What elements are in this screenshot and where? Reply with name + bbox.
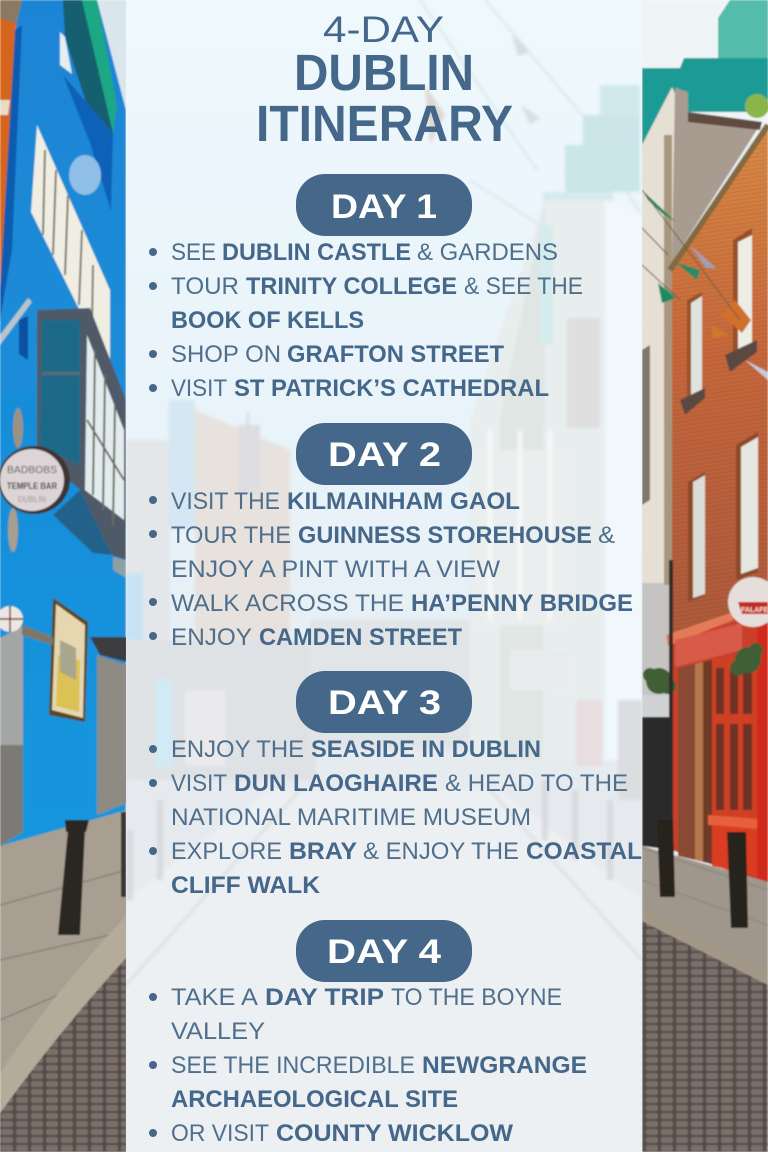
left: lamp <box>0 606 23 632</box>
title <box>256 9 513 152</box>
sign: Temple Bar: TEMPLE BAR <box>7 481 57 492</box>
list: day 1: BOOK OF KELLS <box>171 307 364 334</box>
list: day 4: SEE THE INCREDIBLE <box>171 1052 415 1079</box>
list: day 1: & GARDENS <box>417 239 558 266</box>
list: day 4: OR VISIT <box>171 1120 269 1147</box>
list: day 1: TOUR <box>171 273 239 300</box>
right: shopfront <box>666 610 768 885</box>
pill: day 1: DAY 1 <box>331 188 437 226</box>
list: day 1: VISIT <box>171 375 227 402</box>
pill: day 4: DAY 4 <box>327 933 441 971</box>
left: ground floor <box>0 626 23 846</box>
list: day 1: SEE <box>171 239 216 266</box>
section: day 3 <box>149 671 642 899</box>
translucent panel with faint street behind the text <box>126 0 642 1152</box>
list: day 3 <box>149 736 642 899</box>
list: day 1 <box>149 239 583 402</box>
pill: day 2: DAY 2 <box>328 436 441 474</box>
list: day 2: CAMDEN STREET <box>259 624 462 651</box>
list: day 2: WALK ACROSS THE <box>171 590 404 617</box>
section: day 1 <box>149 174 583 402</box>
list: day 1: SHOP ON <box>171 341 281 368</box>
pill: day 3: DAY 3 <box>328 684 441 722</box>
ghosted bunting <box>420 0 642 290</box>
list: day 4: TAKE A <box>171 984 258 1011</box>
list: day 3: CLIFF WALK <box>171 872 321 899</box>
title: 4-DAY <box>323 9 444 50</box>
list: day 3: NATIONAL MARITIME MUSEUM <box>171 804 531 831</box>
list: day 4: NEWGRANGE <box>422 1052 587 1079</box>
sign: Temple Bar: DUBLIN <box>18 495 46 504</box>
list: day 3: COASTAL <box>526 838 642 865</box>
pill: day 3 <box>296 671 472 733</box>
left: bay window <box>37 308 126 560</box>
list: day 1: TRINITY COLLEGE <box>246 273 457 300</box>
pill: day 1 <box>296 174 472 236</box>
right: bollards <box>657 820 748 928</box>
ghosted teal roofs <box>543 85 640 203</box>
left: upper window strip <box>31 125 110 360</box>
right: hanging plants <box>643 643 763 694</box>
right: bunting flags <box>642 190 768 380</box>
pill: day 2 <box>296 423 472 485</box>
right: pavement and road <box>642 846 768 975</box>
list: day 3: ENJOY THE <box>171 736 304 763</box>
list: day 2: GUINNESS STOREHOUSE <box>298 522 592 549</box>
list: day 4: COUNTY WICKLOW <box>276 1120 513 1147</box>
ghosted road <box>126 780 642 1152</box>
list: day 3: & ENJOY THE <box>363 838 519 865</box>
right: dark doorway <box>642 695 672 717</box>
right: brick building <box>672 125 768 640</box>
list: day 2: VISIT THE <box>171 488 280 515</box>
list: day 2: KILMAINHAM GAOL <box>287 488 520 515</box>
list: day 3: DUN LAOGHAIRE <box>234 770 438 797</box>
list: day 3: BRAY <box>289 838 357 865</box>
list: day 4 <box>149 984 587 1147</box>
right: round shop sign <box>728 577 768 627</box>
sign: Temple Bar <box>0 446 70 514</box>
list: day 3: VISIT <box>171 770 227 797</box>
list: day 4: VALLEY <box>171 1018 265 1045</box>
list: day 1: ST PATRICK’S CATHEDRAL <box>234 375 549 402</box>
ghosted left buildings <box>126 400 470 780</box>
left: poster <box>49 598 88 722</box>
list: day 1: & SEE THE <box>464 273 583 300</box>
title: ITINERARY <box>256 95 513 152</box>
list: day 4: DAY TRIP <box>265 984 384 1011</box>
list: day 1: GRAFTON STREET <box>287 341 504 368</box>
right: cream facade <box>642 87 678 700</box>
right: brown side wall <box>672 88 762 262</box>
left: pavement and road <box>0 810 127 1075</box>
title: DUBLIN <box>294 44 474 101</box>
right: sky and teal block <box>642 0 768 140</box>
left: bollard <box>58 820 89 935</box>
list: day 3: EXPLORE <box>171 838 282 865</box>
list: day 3: SEASIDE IN DUBLIN <box>311 736 541 763</box>
list: day 4: ARCHAEOLOGICAL SITE <box>171 1086 458 1113</box>
list: day 2: TOUR THE <box>171 522 291 549</box>
list: day 2: ENJOY A PINT WITH A VIEW <box>171 556 500 583</box>
list: day 2: ENJOY <box>171 624 252 651</box>
section: day 2 <box>149 423 633 651</box>
pill: day 4 <box>296 920 472 982</box>
list: day 3: & HEAD TO THE <box>445 770 628 797</box>
list: day 2: HA’PENNY BRIDGE <box>411 590 633 617</box>
sign: Temple Bar: BADBOBS <box>7 465 57 476</box>
left: sign ornaments <box>13 408 23 448</box>
ghosted right buildings <box>470 200 642 800</box>
section: day 4 <box>149 920 587 1147</box>
left: blue building <box>0 0 126 850</box>
list: day 1: DUBLIN CASTLE <box>222 239 411 266</box>
list: day 2: & <box>598 522 615 549</box>
left: orange brick edge <box>0 0 22 290</box>
list: day 2 <box>149 488 633 651</box>
list: day 4: TO THE BOYNE <box>391 984 562 1011</box>
left: green awning <box>63 0 113 137</box>
